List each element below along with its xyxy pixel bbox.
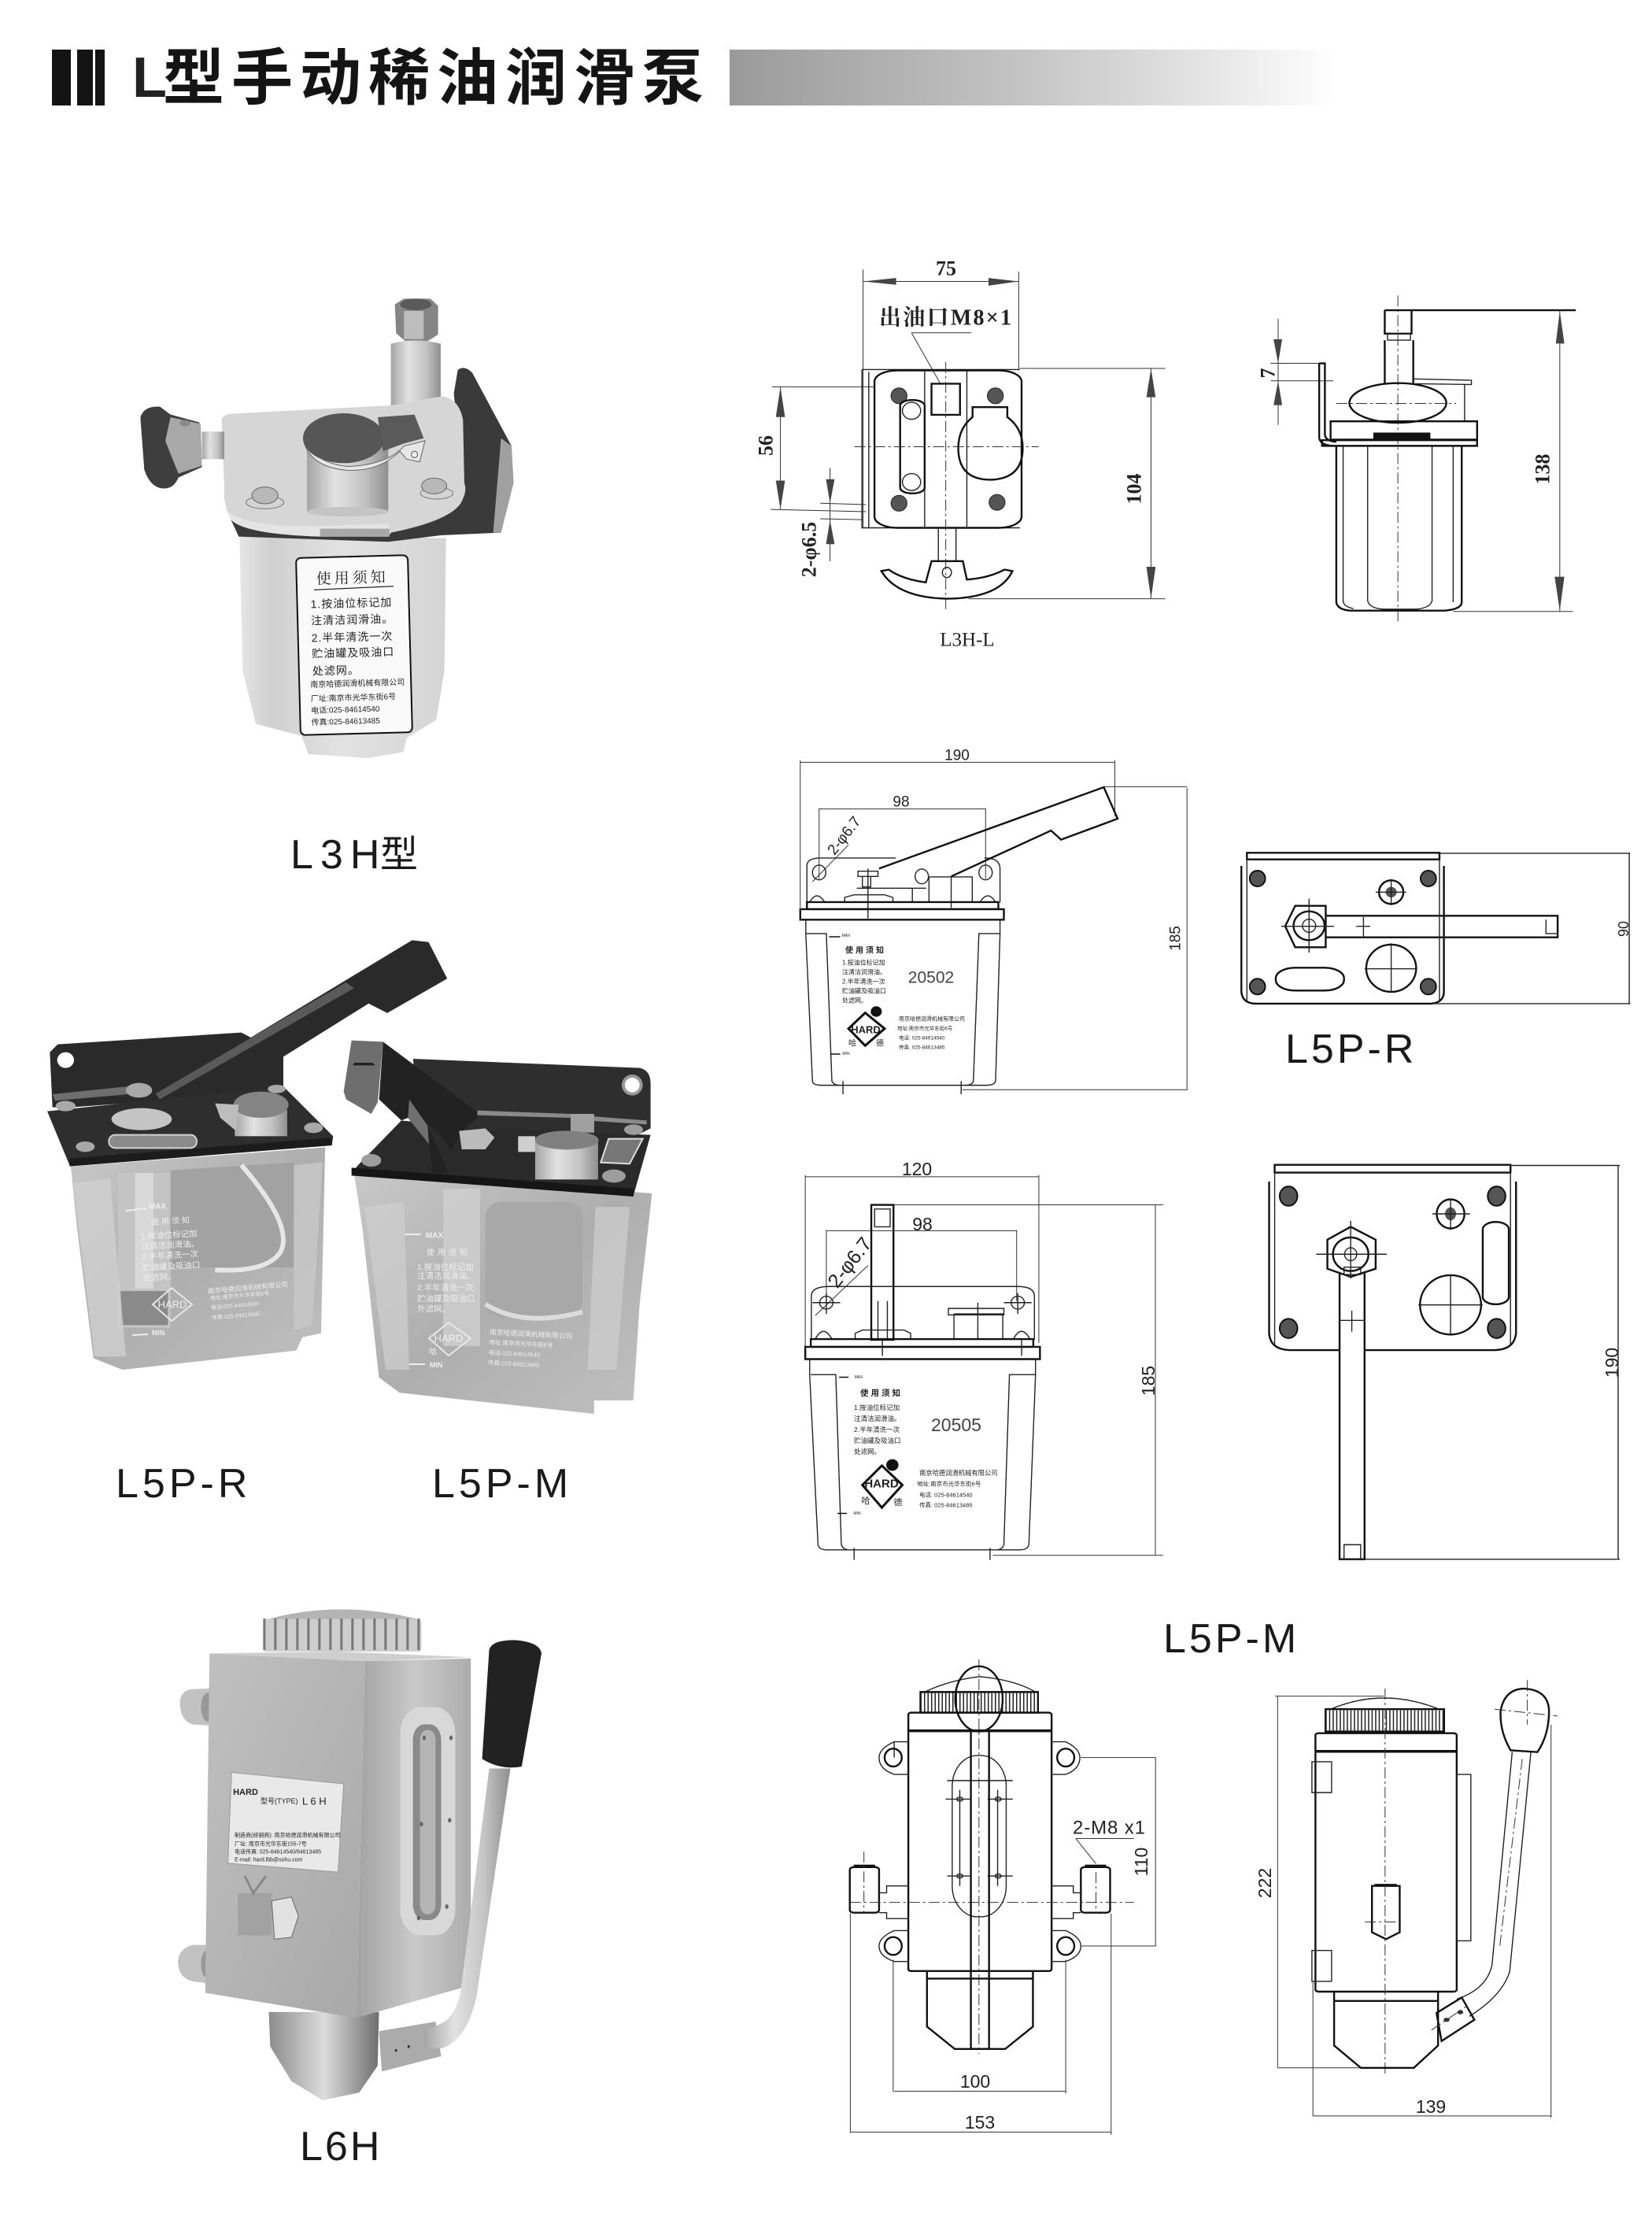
drawing: L3H side view [1271, 295, 1576, 622]
dimension labels and caption: 185 [1138, 1366, 1159, 1396]
notice text and marks: 德 [894, 1496, 902, 1508]
tank markings: L5P-R: 2.半年清洗一次 [142, 1249, 199, 1262]
tank markings: L5P-M: 地址:南京市光华东街6号 [489, 1337, 553, 1349]
tank markings: L5P-R: 注清洁润滑油。 [141, 1238, 199, 1252]
drawing: L5P-R top view [1241, 853, 1630, 1004]
dimension labels and caption [825, 748, 1632, 1072]
tank markings: L5P-R: 传真:025-84613485 [212, 1310, 260, 1321]
notice text and marks: 德 [876, 1038, 884, 1049]
photo: L3H reservoir [239, 534, 446, 758]
notice text and marks: MIN [853, 1511, 861, 1516]
notice text and marks: MIN [842, 1052, 850, 1056]
notice text and marks [853, 1375, 998, 1516]
tank markings: L5P-M: 注清洁润滑油。 [417, 1271, 475, 1281]
caption: L3H型: 型 [380, 834, 418, 875]
photo: L5P-R pump head [47, 1033, 333, 1356]
tank markings: L5P-M: 外滤网。 [417, 1304, 450, 1314]
drawing: L6H front view [850, 1659, 1155, 2135]
gradient bar [730, 50, 1336, 105]
nameplate text: 厂址: 南京市光华东街155-7号 [235, 1841, 307, 1847]
photo: L3H pump head [140, 298, 514, 542]
dimension labels [960, 1817, 1446, 2133]
notice text and marks: HARD [864, 1477, 899, 1491]
dimension labels: 2-M8 x1 [1073, 1817, 1145, 1839]
dimension labels: 110 [1131, 1848, 1151, 1876]
drawing: L5P-M front view [805, 1175, 1163, 1560]
sticker: usage notice: 使用须知 [316, 568, 389, 588]
dimension labels: 104 [1122, 474, 1146, 504]
tank markings: L5P-R: 地址:南京市光华东街6号 [210, 1289, 270, 1301]
sticker: usage notice: 厂址:南京市光华东街6号 [311, 691, 396, 704]
sticker: usage notice: 南京哈德润滑机械有限公司 [310, 677, 405, 690]
title banner [52, 43, 1336, 113]
caption: L3H型: L3H [290, 832, 386, 878]
notice text and marks: 注清洁润滑油。 [854, 1415, 901, 1422]
notice text and marks: 20502 [908, 968, 954, 987]
dimension labels and caption: 2-φ6.7 [825, 814, 864, 858]
notice text and marks: 南京哈德润滑机械有限公司 [899, 1016, 965, 1022]
nameplate text: E-mail: hard.lbb@sohu.com [235, 1858, 303, 1863]
photo: L6H pump [178, 1609, 541, 2100]
nameplate text: 电话传真: 025-84614540/84613485 [235, 1848, 321, 1855]
sticker: usage notice: 传真:025-84613485 [311, 716, 380, 727]
heading: L [132, 46, 167, 109]
notice text and marks: 贮油罐及吸油口 [854, 1437, 901, 1445]
tank markings: L5P-M: 南京哈德润滑机械有限公司 [490, 1327, 573, 1341]
panel: L6H dimension drawing [850, 1659, 1558, 2135]
notice text and marks: HARD [851, 1023, 881, 1036]
heading: 型手动稀油润滑泵 [163, 43, 711, 113]
tank markings: L5P-R: 电话:025-84614540 [211, 1300, 259, 1311]
nameplate text: 型号(TYPE) [261, 1797, 298, 1805]
nameplate text: L 6 H [302, 1795, 327, 1807]
notice text and marks: 南京哈德润滑机械有限公司 [919, 1469, 998, 1477]
dimension labels: 222 [1255, 1868, 1275, 1898]
dimension labels: 75 [936, 257, 956, 280]
tank markings: L5P-M: HARD [434, 1332, 463, 1345]
tank markings: L5P-M: 贮油罐及吸油口 [417, 1293, 475, 1304]
drawing: L6H side view [1275, 1680, 1558, 2118]
tank markings: L5P-R: MAX [149, 1203, 166, 1211]
sticker: usage notice: 2.半年清洗一次 [312, 630, 394, 644]
panel: L6H photo [178, 1609, 541, 2170]
photo: L5P-M pump head [344, 1041, 651, 1370]
dimension labels: 56 [754, 435, 778, 456]
drawing: L3H front view [771, 269, 1166, 609]
tank markings: L5P-R: 处滤网。 [142, 1271, 176, 1283]
nameplate text: 制造商(经销商): 南京哈德润滑机械有限公司 [235, 1831, 341, 1839]
dimension labels and caption: L5P-M [1163, 1616, 1299, 1662]
tank markings: L5P-R: 使用须知 [151, 1215, 192, 1227]
notice text and marks: 2.半年清洗一次 [842, 978, 885, 986]
tank markings: L5P-R [126, 1203, 290, 1337]
dimension labels: 153 [965, 2112, 995, 2133]
tank markings: L5P-M: 电话:025-84614540 [488, 1348, 540, 1359]
nameplate text: HARD [233, 1788, 258, 1797]
sticker: usage notice: 处滤网。 [312, 664, 360, 677]
sticker: usage notice: 电话:025-84614540 [311, 704, 380, 716]
dimension labels [754, 257, 1554, 650]
sticker: usage notice: 贮油罐及吸油口 [312, 646, 394, 660]
notice text and marks: 1.按油位标记加 [854, 1404, 900, 1411]
notice text and marks: MAX [842, 934, 851, 938]
notice text and marks: 传真: 025-84613485 [919, 1500, 973, 1508]
tank markings: L5P-M: MIN [430, 1361, 442, 1369]
notice text and marks: 地址:南京市光华东街6号 [897, 1025, 953, 1031]
dimension labels: L3H-L [940, 630, 995, 650]
dimension labels: 100 [960, 2071, 990, 2092]
tank markings: L5P-R: 1.按油位标记加 [141, 1228, 198, 1241]
panel: L3H photo [140, 298, 514, 878]
panel: L5P-R dimension drawing [800, 748, 1632, 1094]
notice text and marks: 处滤网。 [842, 997, 867, 1004]
tank markings: L5P-M [405, 1231, 573, 1371]
drawing: L5P-R front view [800, 760, 1187, 1094]
notice text and marks: 电话: 025-84614540 [919, 1491, 973, 1499]
notice text and marks: 哈 [848, 1038, 856, 1049]
dimension labels and caption: 120 [902, 1159, 932, 1179]
tank markings: L5P-M: 2.半年清洗一次 [417, 1282, 474, 1293]
tank markings: L5P-R: MIN [152, 1329, 164, 1337]
dimension labels: 139 [1416, 2096, 1446, 2117]
photo: L5P-R tank [71, 1147, 325, 1370]
notice text and marks: 哈 [861, 1496, 870, 1506]
sticker: usage notice [296, 555, 412, 735]
tank markings: L5P-M: 哈 [429, 1346, 437, 1357]
dimension labels and caption: 98 [912, 1214, 933, 1234]
icon: three vertical bars [52, 50, 105, 105]
photo: L5P-M tank [354, 1175, 652, 1414]
caption: L6H: L6H [300, 2124, 382, 2170]
dimension labels and caption: 190 [944, 748, 970, 764]
caption: L5P-M: L5P-M [432, 1461, 572, 1507]
drawing: L5P-M top view [1269, 1165, 1620, 1559]
dimension labels: 2-φ6.5 [798, 522, 820, 577]
nameplate text [233, 1788, 341, 1863]
tank markings: L5P-M: 1.按油位标记加 [417, 1262, 474, 1272]
dimension labels and caption: 90 [1616, 921, 1632, 937]
sticker: usage notice: 1.按油位标记加 [310, 596, 392, 610]
notice text and marks: 1.按油位标记加 [842, 959, 885, 967]
notice text and marks: 传真: 025-84613485 [899, 1044, 945, 1050]
notice text and marks [842, 934, 965, 1056]
sticker: usage notice: 注清洁润滑油。 [311, 612, 394, 627]
dimension labels: 138 [1532, 453, 1554, 485]
tank markings: L5P-R: HARD [158, 1299, 187, 1310]
notice text and marks: MAX [855, 1375, 863, 1380]
dimension labels and caption: L5P-R [1285, 1027, 1417, 1072]
notice text and marks: 地址:南京市光华东街6号 [917, 1480, 981, 1488]
tank markings: L5P-R: 南京哈德润滑机械有限公司 [208, 1280, 288, 1295]
dimension labels and caption [823, 1159, 1622, 1662]
notice text and marks: 注清洁润滑油。 [842, 968, 886, 976]
notice text and marks: 电话: 025-84614540 [899, 1034, 945, 1041]
tank markings: L5P-M: 传真:025-84613485 [488, 1358, 540, 1369]
caption: L5P-R: L5P-R [116, 1461, 251, 1507]
dimension labels and caption: 190 [1602, 1348, 1622, 1378]
photo: L5P-R lever handle [151, 940, 447, 1101]
dimension labels and caption: 185 [1168, 926, 1184, 951]
notice text and marks: 2.半年清洗一次 [854, 1426, 900, 1434]
tank markings: L5P-M: 使用须知 [427, 1247, 471, 1258]
tank markings: L5P-M: MAX [426, 1231, 443, 1241]
notice text and marks: 使用须知 [845, 945, 886, 956]
dimension labels: 7 [1256, 368, 1280, 378]
dimension labels and caption: 2-φ6.7 [823, 1234, 877, 1292]
dimension labels and caption: 98 [893, 794, 910, 811]
notice text and marks: 贮油罐及吸油口 [842, 987, 886, 995]
panel: L3H-L dimension drawing [754, 257, 1576, 650]
tank markings: L5P-R: 贮油罐及吸油口 [142, 1260, 201, 1273]
notice text and marks: 20505 [931, 1415, 981, 1435]
notice text and marks: 使用须知 [860, 1388, 903, 1398]
notice text and marks: 处滤网。 [854, 1448, 881, 1456]
panel: L5P-M dimension drawing [805, 1159, 1622, 1662]
panel: L5P photo [47, 940, 652, 1507]
dimension labels: 出油口M8×1 [879, 305, 1011, 331]
